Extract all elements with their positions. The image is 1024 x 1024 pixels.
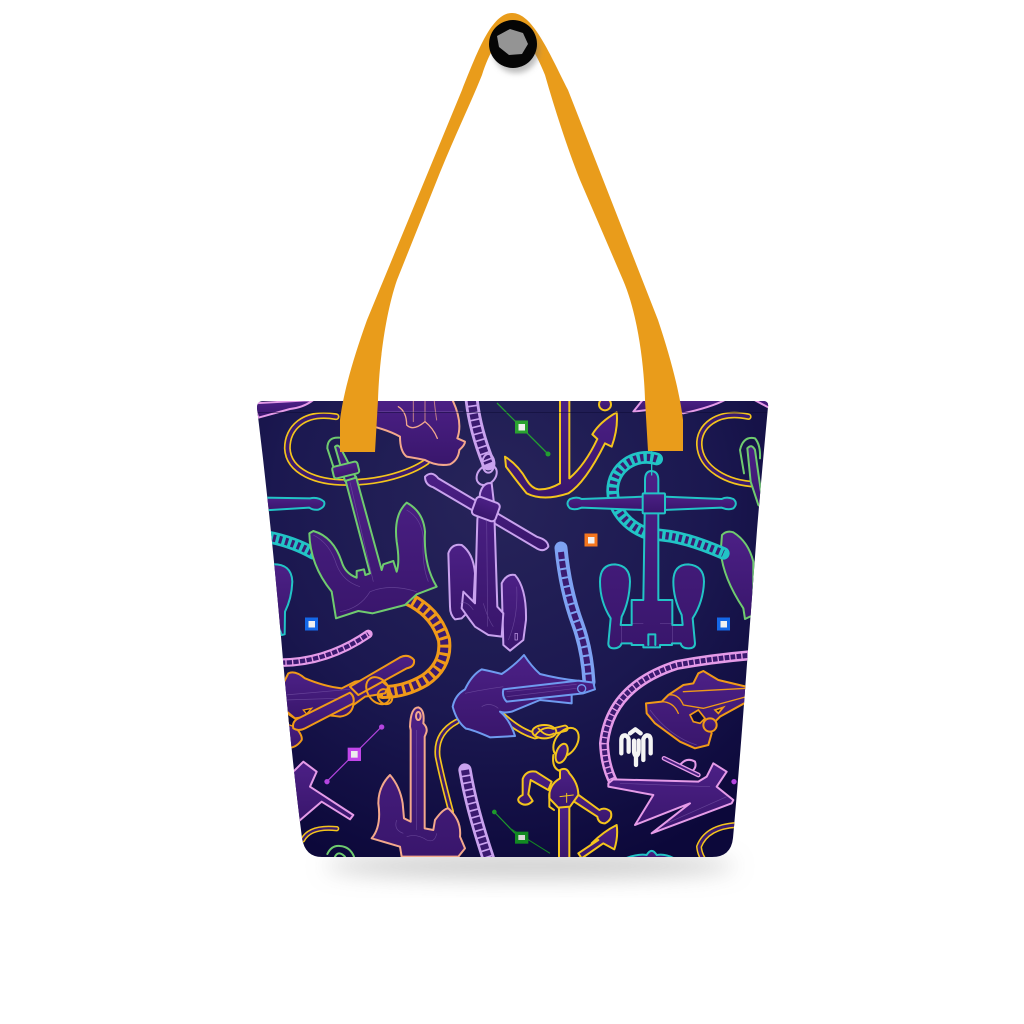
lilac corner [754, 401, 768, 408]
pink small anchor [294, 760, 354, 822]
lilac left fluke [448, 545, 475, 619]
top-right section of pattern [505, 398, 770, 648]
lilac shackle links [476, 453, 498, 486]
green anchor right edge [721, 438, 763, 619]
lilac anchor centre [425, 400, 548, 651]
teal rope left [267, 537, 313, 553]
bag body [257, 401, 768, 857]
orange rope [383, 599, 444, 692]
salmon anchor top [374, 398, 465, 465]
bottom-right section of pattern [510, 655, 753, 863]
lilac collar [471, 496, 501, 522]
peg shadow [493, 27, 539, 73]
yellow small arc [303, 828, 337, 840]
lilac rod [425, 474, 548, 550]
orange shackle links [361, 673, 395, 709]
teal anchor bottom [622, 851, 677, 860]
pink chain [280, 634, 368, 663]
orange lower fluke [272, 718, 302, 748]
pink big chain [604, 655, 753, 783]
orange anchor left [272, 656, 414, 748]
blue square right [717, 618, 730, 630]
yellow rope lower [437, 722, 457, 812]
white brand logo [621, 729, 651, 765]
blue anchor [453, 655, 595, 737]
green connector line [492, 810, 515, 833]
orange anchor right [646, 671, 753, 748]
pink anchor right [608, 758, 733, 833]
teal fluke left [270, 564, 292, 635]
yellow anchor top [505, 398, 617, 497]
orange holes [285, 708, 312, 726]
yellow oval bottom right [699, 825, 737, 863]
purple connector square [324, 724, 384, 784]
lilac rope chain [472, 400, 488, 463]
blue chain [561, 548, 589, 682]
orange square [584, 534, 598, 546]
green small arc [327, 846, 354, 857]
teal rope ring [613, 457, 723, 553]
orange body [272, 672, 388, 718]
repeating anchor pattern [253, 398, 770, 863]
salmon anchor bottom [372, 707, 465, 857]
teal anchor [567, 452, 736, 648]
blue square left [305, 618, 318, 630]
lilac chain lower [465, 770, 490, 863]
teal stock left [265, 498, 324, 510]
lilac shape top right [633, 399, 727, 413]
yellow rope right [699, 415, 757, 484]
yellow knot rope [503, 717, 565, 738]
yellow rope ring [287, 416, 427, 482]
lilac corner shape [253, 400, 313, 418]
lilac right fluke [502, 575, 526, 651]
shadow under bag [325, 854, 735, 878]
yellow anchor bottom [518, 723, 617, 858]
wall peg [489, 20, 537, 68]
orange rod [350, 656, 414, 695]
green connector square bottom [510, 828, 550, 853]
orange handles [340, 13, 683, 452]
green anchor [309, 438, 437, 618]
green square with connector top [497, 403, 550, 456]
lilac shank and crown [462, 483, 503, 637]
top-left section of pattern [253, 398, 465, 635]
purple dot [731, 779, 737, 784]
bottom-left section of pattern [280, 634, 515, 863]
tote bag product illustration [257, 13, 768, 888]
